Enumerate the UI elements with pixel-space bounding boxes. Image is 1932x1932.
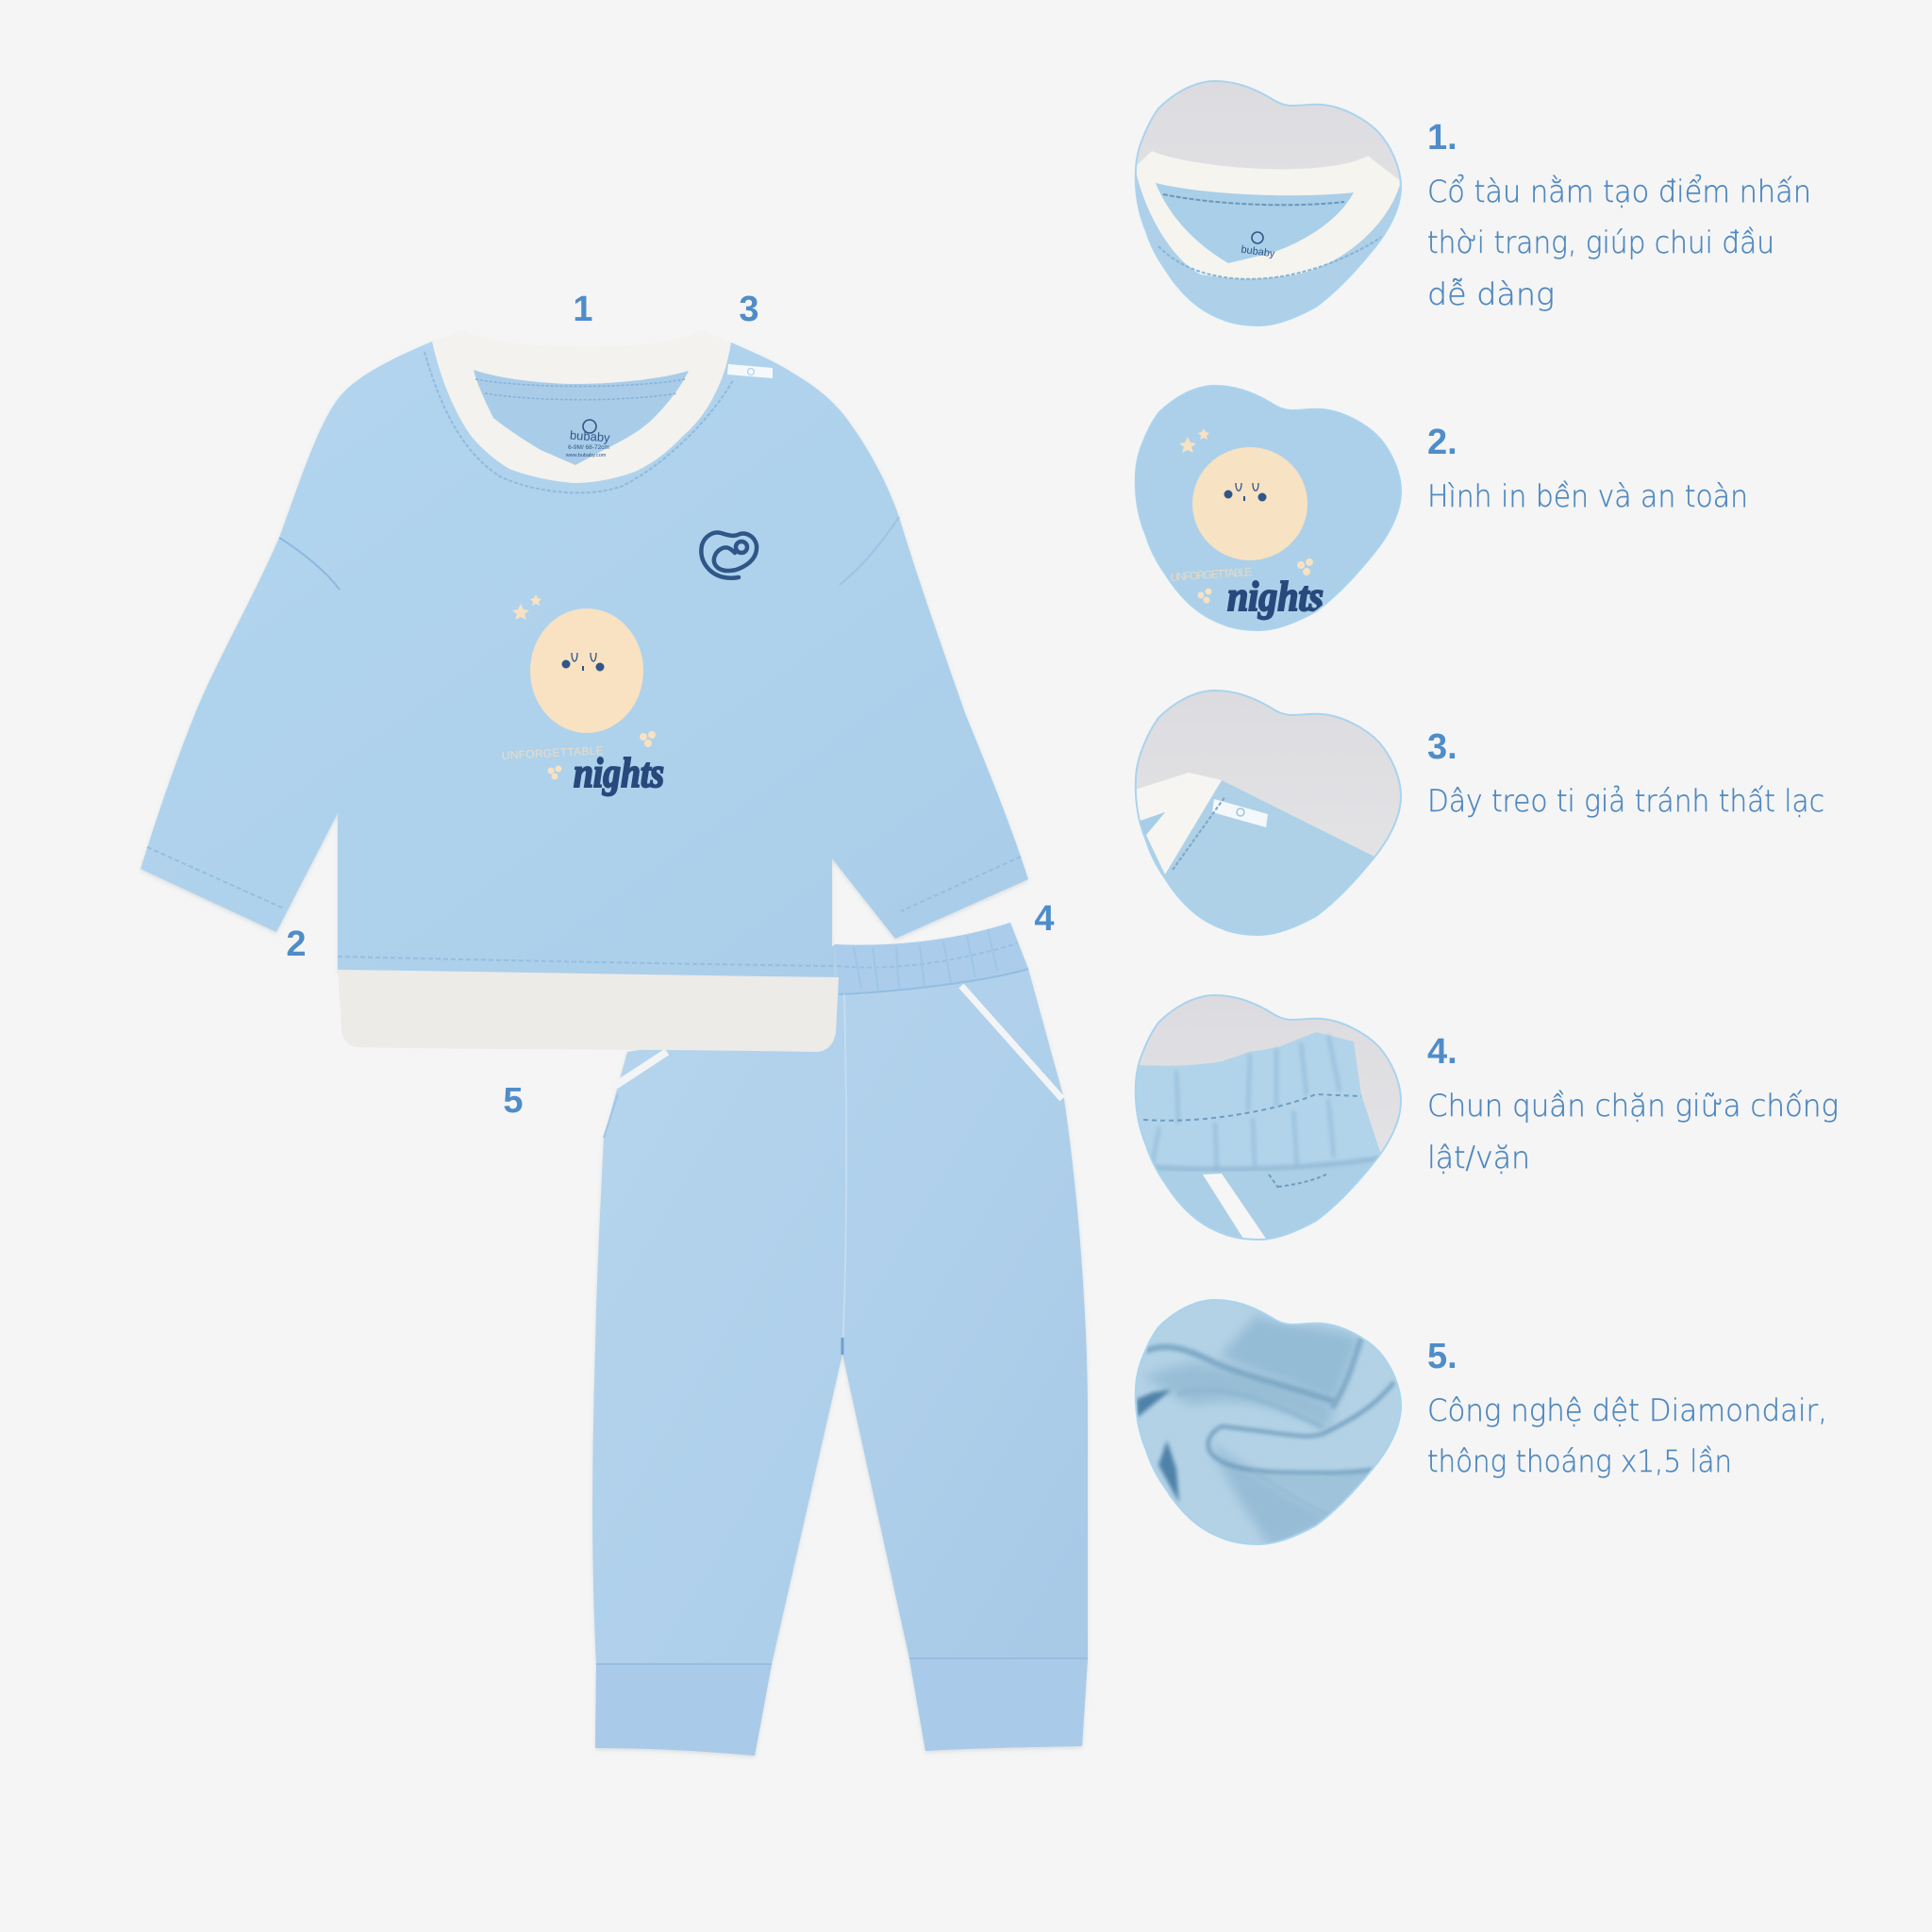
- description 1: dễ dàng: [1427, 276, 1555, 312]
- feature text 3: [1427, 727, 1824, 819]
- sleeve seams: [279, 538, 340, 590]
- description 1: thời trang, giúp chui đầu: [1427, 225, 1774, 260]
- neck inside: [474, 370, 689, 465]
- feature text 4: [1427, 1032, 1839, 1175]
- feature 2: detail heart moon print: nights: [1227, 574, 1324, 620]
- shirt: [141, 330, 1028, 1052]
- snap tab: [727, 364, 773, 378]
- marker 4: 4: [1034, 899, 1055, 939]
- neck label: bubaby: [570, 428, 611, 445]
- heading 1: 1.: [1427, 118, 1457, 158]
- marker 2: 2: [286, 924, 307, 964]
- description 2: Hình in bền và an toàn: [1427, 478, 1748, 514]
- waistband: [835, 923, 1028, 994]
- heading 4: 4.: [1427, 1032, 1457, 1072]
- feature text 1: [1427, 118, 1811, 312]
- description 3: Dây treo ti giả tránh thất lạc: [1427, 783, 1824, 819]
- description 4: [1427, 1088, 1839, 1175]
- neck label: [565, 420, 611, 458]
- moon print: [501, 594, 664, 796]
- feature 3: detail heart pacifier tab: [1135, 691, 1401, 936]
- feature 2: detail heart moon print: UNFORGETTABLE: [1170, 565, 1253, 584]
- right cuff: [909, 1658, 1088, 1751]
- neck label: 6-9M/ 68-72cm: [568, 444, 609, 451]
- feature text 5: [1427, 1337, 1827, 1479]
- pants: [592, 923, 1088, 1756]
- neck stitching: [425, 352, 733, 492]
- description 4: lật/vặn: [1427, 1140, 1530, 1175]
- description 1: [1427, 174, 1811, 312]
- collar: [432, 330, 731, 483]
- left cuff: [595, 1664, 772, 1756]
- moon print: nights: [574, 750, 664, 796]
- hem band: [338, 970, 839, 1052]
- feature 1: detail heart neckline: [1135, 81, 1401, 326]
- neck label: www.bubaby.com: [565, 453, 607, 458]
- description 5: thông thoáng x1,5 lần: [1427, 1443, 1732, 1479]
- chest logo: [701, 533, 757, 578]
- marker 3: 3: [739, 290, 759, 329]
- marker 5: 5: [503, 1081, 524, 1121]
- heading 5: 5.: [1427, 1337, 1457, 1376]
- description 1: Cổ tàu nằm tạo điểm nhấn: [1427, 174, 1811, 209]
- description 4: Chun quần chặn giữa chống: [1427, 1088, 1839, 1124]
- heading 2: 2.: [1427, 423, 1457, 462]
- feature 5: detail heart fabric: [1135, 1300, 1401, 1550]
- feature 1: detail heart neckline: bubaby: [1241, 244, 1276, 260]
- number markers on garment: [286, 290, 1055, 1121]
- pocket trims: [961, 986, 1062, 1099]
- center seam: [842, 994, 846, 1354]
- feature 2: detail heart moon print: [1135, 386, 1401, 631]
- shirt body and sleeves: [141, 341, 1028, 977]
- marker 1: 1: [573, 290, 593, 329]
- feature 4: detail heart waistband: [1135, 995, 1401, 1250]
- heading 3: 3.: [1427, 727, 1457, 767]
- description 5: [1427, 1392, 1827, 1479]
- description 5: Công nghệ dệt Diamondair,: [1427, 1392, 1827, 1428]
- feature text 2: [1427, 423, 1748, 514]
- moon print: UNFORGETTABLE: [501, 743, 604, 762]
